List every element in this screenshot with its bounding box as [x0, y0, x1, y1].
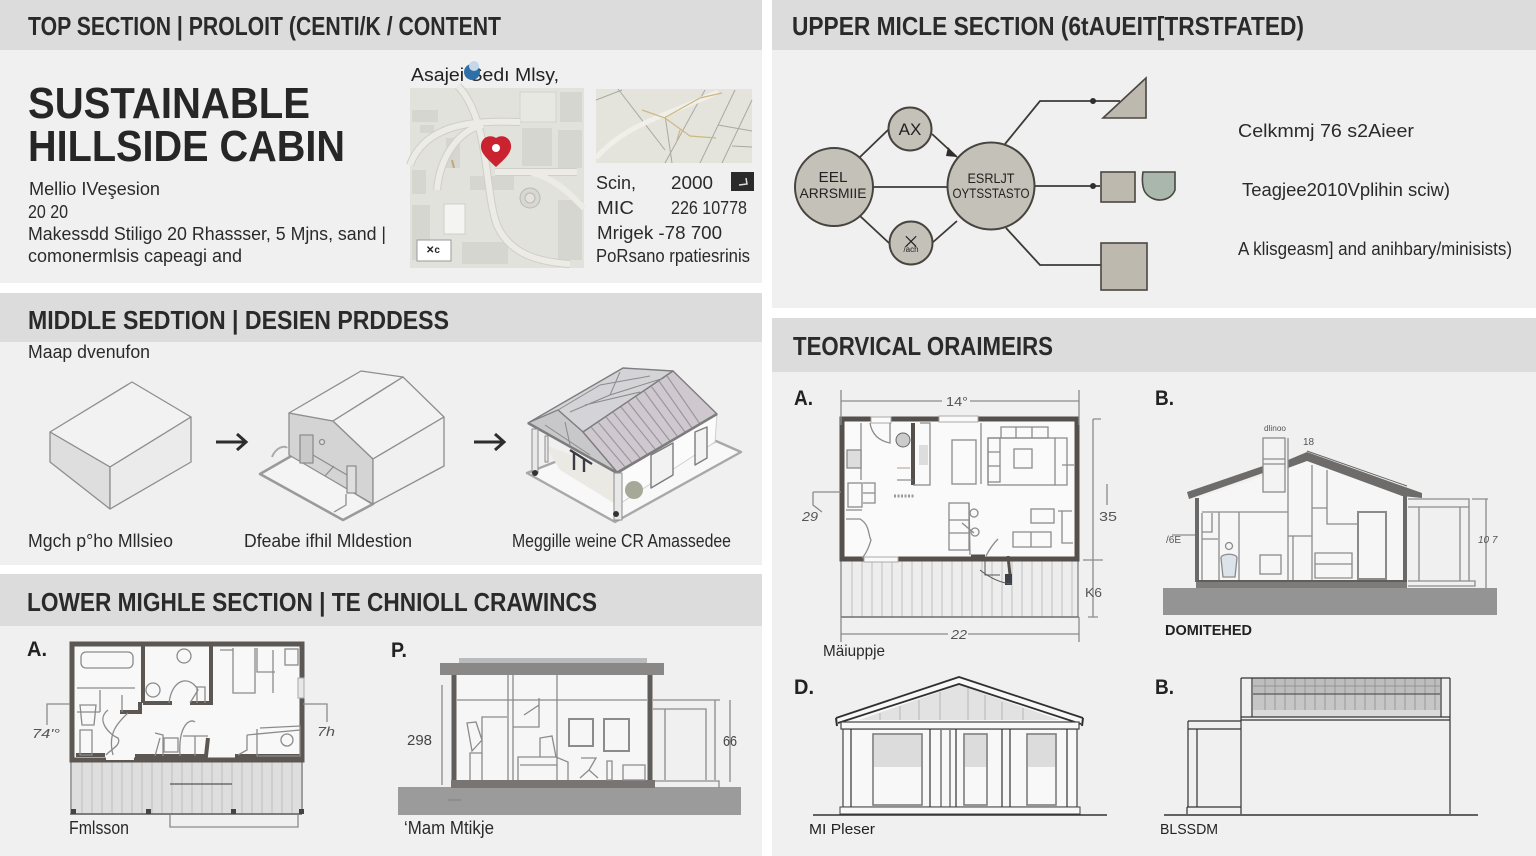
step captions: Dfeabe ifhil Mldestion	[244, 531, 412, 551]
caption: massing: Maap dvenufon	[28, 342, 150, 362]
icon: location pin	[481, 136, 511, 167]
heading: lower section: LOWER MIGHLE SECTION | TE CHNIOLL CRAWINCS	[27, 587, 597, 617]
caption: side elevation: BLSSDM	[1160, 821, 1218, 838]
project description text: Mellio IVeşesion	[29, 179, 160, 199]
step captions	[28, 531, 731, 551]
arrow 2	[474, 434, 504, 450]
node: ESRLIT: ESRLJT	[968, 170, 1015, 186]
step captions: Meggille weine CR Amassedee	[512, 531, 731, 551]
project description text: comonermlsis capeagi and	[28, 246, 242, 266]
label P: P.	[391, 639, 407, 662]
node: ESRLIT: OYTSSTASTO	[952, 185, 1030, 201]
project description text: 20 20	[28, 202, 68, 222]
dimensions: 35	[1099, 509, 1117, 524]
dimensions: 22	[950, 627, 968, 642]
node: ESRLIT	[948, 142, 1034, 230]
title	[28, 79, 345, 171]
icon: map title globe	[464, 61, 480, 80]
node: AX bottom: ⨉	[905, 234, 917, 251]
label D: D.	[794, 676, 814, 699]
title: SUSTAINABLE	[28, 79, 310, 128]
heading: middle section: MIDDLE SEDTION | DESIEN PRDDESS	[28, 305, 449, 335]
caption: floor plan: Mäiuppje	[823, 643, 885, 660]
icon: dark data chip	[731, 172, 754, 191]
panel: top section	[0, 0, 762, 283]
dimension labels: 66	[723, 733, 737, 750]
panel: lower middle section	[0, 574, 762, 856]
label B: B.	[1155, 676, 1174, 699]
heading: upper section: UPPER MICLE SECTION (6tAUEIT[TRSTFATED)	[792, 11, 1304, 41]
map legend chip: ✕c	[426, 245, 440, 256]
dimensions: 18	[1303, 437, 1315, 448]
context map	[596, 89, 752, 163]
dimensions: dlinoo	[1264, 424, 1287, 433]
dimension leaders: 74'°	[32, 726, 60, 741]
side elevation	[1164, 678, 1478, 815]
concept diagram	[795, 78, 1175, 290]
site data table: Scin,	[596, 173, 636, 193]
diagram notes: Celkmmj 76 s2Aieer	[1238, 121, 1414, 141]
label B: B.	[1155, 387, 1174, 410]
panel: middle section	[0, 293, 762, 565]
heading: top section: TOP SECTION | PROLOIT (CENTI/K / CONTENT	[28, 11, 501, 41]
dimensions: 10 7	[1478, 535, 1498, 546]
dimensions: 29	[801, 509, 818, 524]
caption: section: ‘Mam Mtikje	[404, 818, 494, 838]
site data table: PoRsano rpatiesrinis	[596, 246, 750, 266]
node: AX bottom	[890, 222, 932, 264]
dimension labels: 298	[407, 732, 432, 749]
arrow 1	[216, 434, 246, 450]
dimensions: K6	[1085, 585, 1102, 600]
dimension labels	[407, 732, 737, 750]
section lower	[398, 658, 741, 815]
project description text: Makessdd Stiligo 20 Rhassser, 5 Mjns, sand |	[28, 224, 386, 244]
project description text	[28, 179, 386, 266]
dimensions	[1166, 424, 1498, 546]
detailed floor plan	[801, 390, 1117, 642]
label A: A.	[27, 638, 47, 661]
site data table: MIC	[597, 198, 634, 218]
node: EEL: ARRSMIIE	[800, 185, 866, 201]
dimension leaders: 7h	[317, 724, 335, 739]
node: EEL: EEL	[818, 169, 848, 186]
diagram notes: Teagjee2010Vplihin sciw)	[1242, 180, 1450, 200]
dimensions	[801, 390, 1117, 642]
node: AX top	[888, 108, 932, 150]
caption: section: DOMITEHED	[1165, 622, 1252, 639]
caption: front elevation: MI Pleser	[809, 821, 875, 838]
panel: upper middle section	[772, 0, 1536, 308]
map legend chip	[417, 240, 451, 261]
heading: technical drawings: TEORVICAL ORAIMEIRS	[793, 331, 1053, 361]
map title: Asajei Sedı Mlsy,	[411, 65, 559, 85]
node: AX bottom: /ach	[903, 245, 919, 254]
massing step 1 box	[50, 382, 191, 509]
site data table: Mrigek -78 700	[597, 223, 722, 243]
floor plan lower	[32, 644, 335, 827]
node: AX top: AX	[899, 120, 921, 139]
detailed section	[1163, 424, 1498, 615]
step captions: Mgch p°ho Mllsieo	[28, 531, 173, 551]
site map	[410, 86, 584, 268]
caption: floor plan: Fmlsson	[69, 818, 129, 838]
rendered cabin	[527, 368, 741, 522]
diagram notes: A klisgeasm] and anihbary/minisists)	[1238, 239, 1512, 259]
output shapes	[1101, 78, 1175, 290]
diagram notes	[1238, 121, 1512, 259]
dimensions: 14°	[946, 394, 968, 409]
site data table: 2000	[671, 173, 713, 193]
site data table	[596, 172, 754, 266]
dimensions: /6E	[1166, 535, 1181, 546]
node: EEL	[795, 148, 873, 226]
title: HILLSIDE CABIN	[28, 122, 345, 171]
massing step 2 cabin form	[260, 371, 444, 520]
site data table: 226 10778	[671, 198, 747, 218]
front elevation	[813, 677, 1107, 815]
dimension leaders	[32, 704, 335, 741]
label A: A.	[794, 387, 813, 410]
panel: technical drawings	[772, 318, 1536, 856]
